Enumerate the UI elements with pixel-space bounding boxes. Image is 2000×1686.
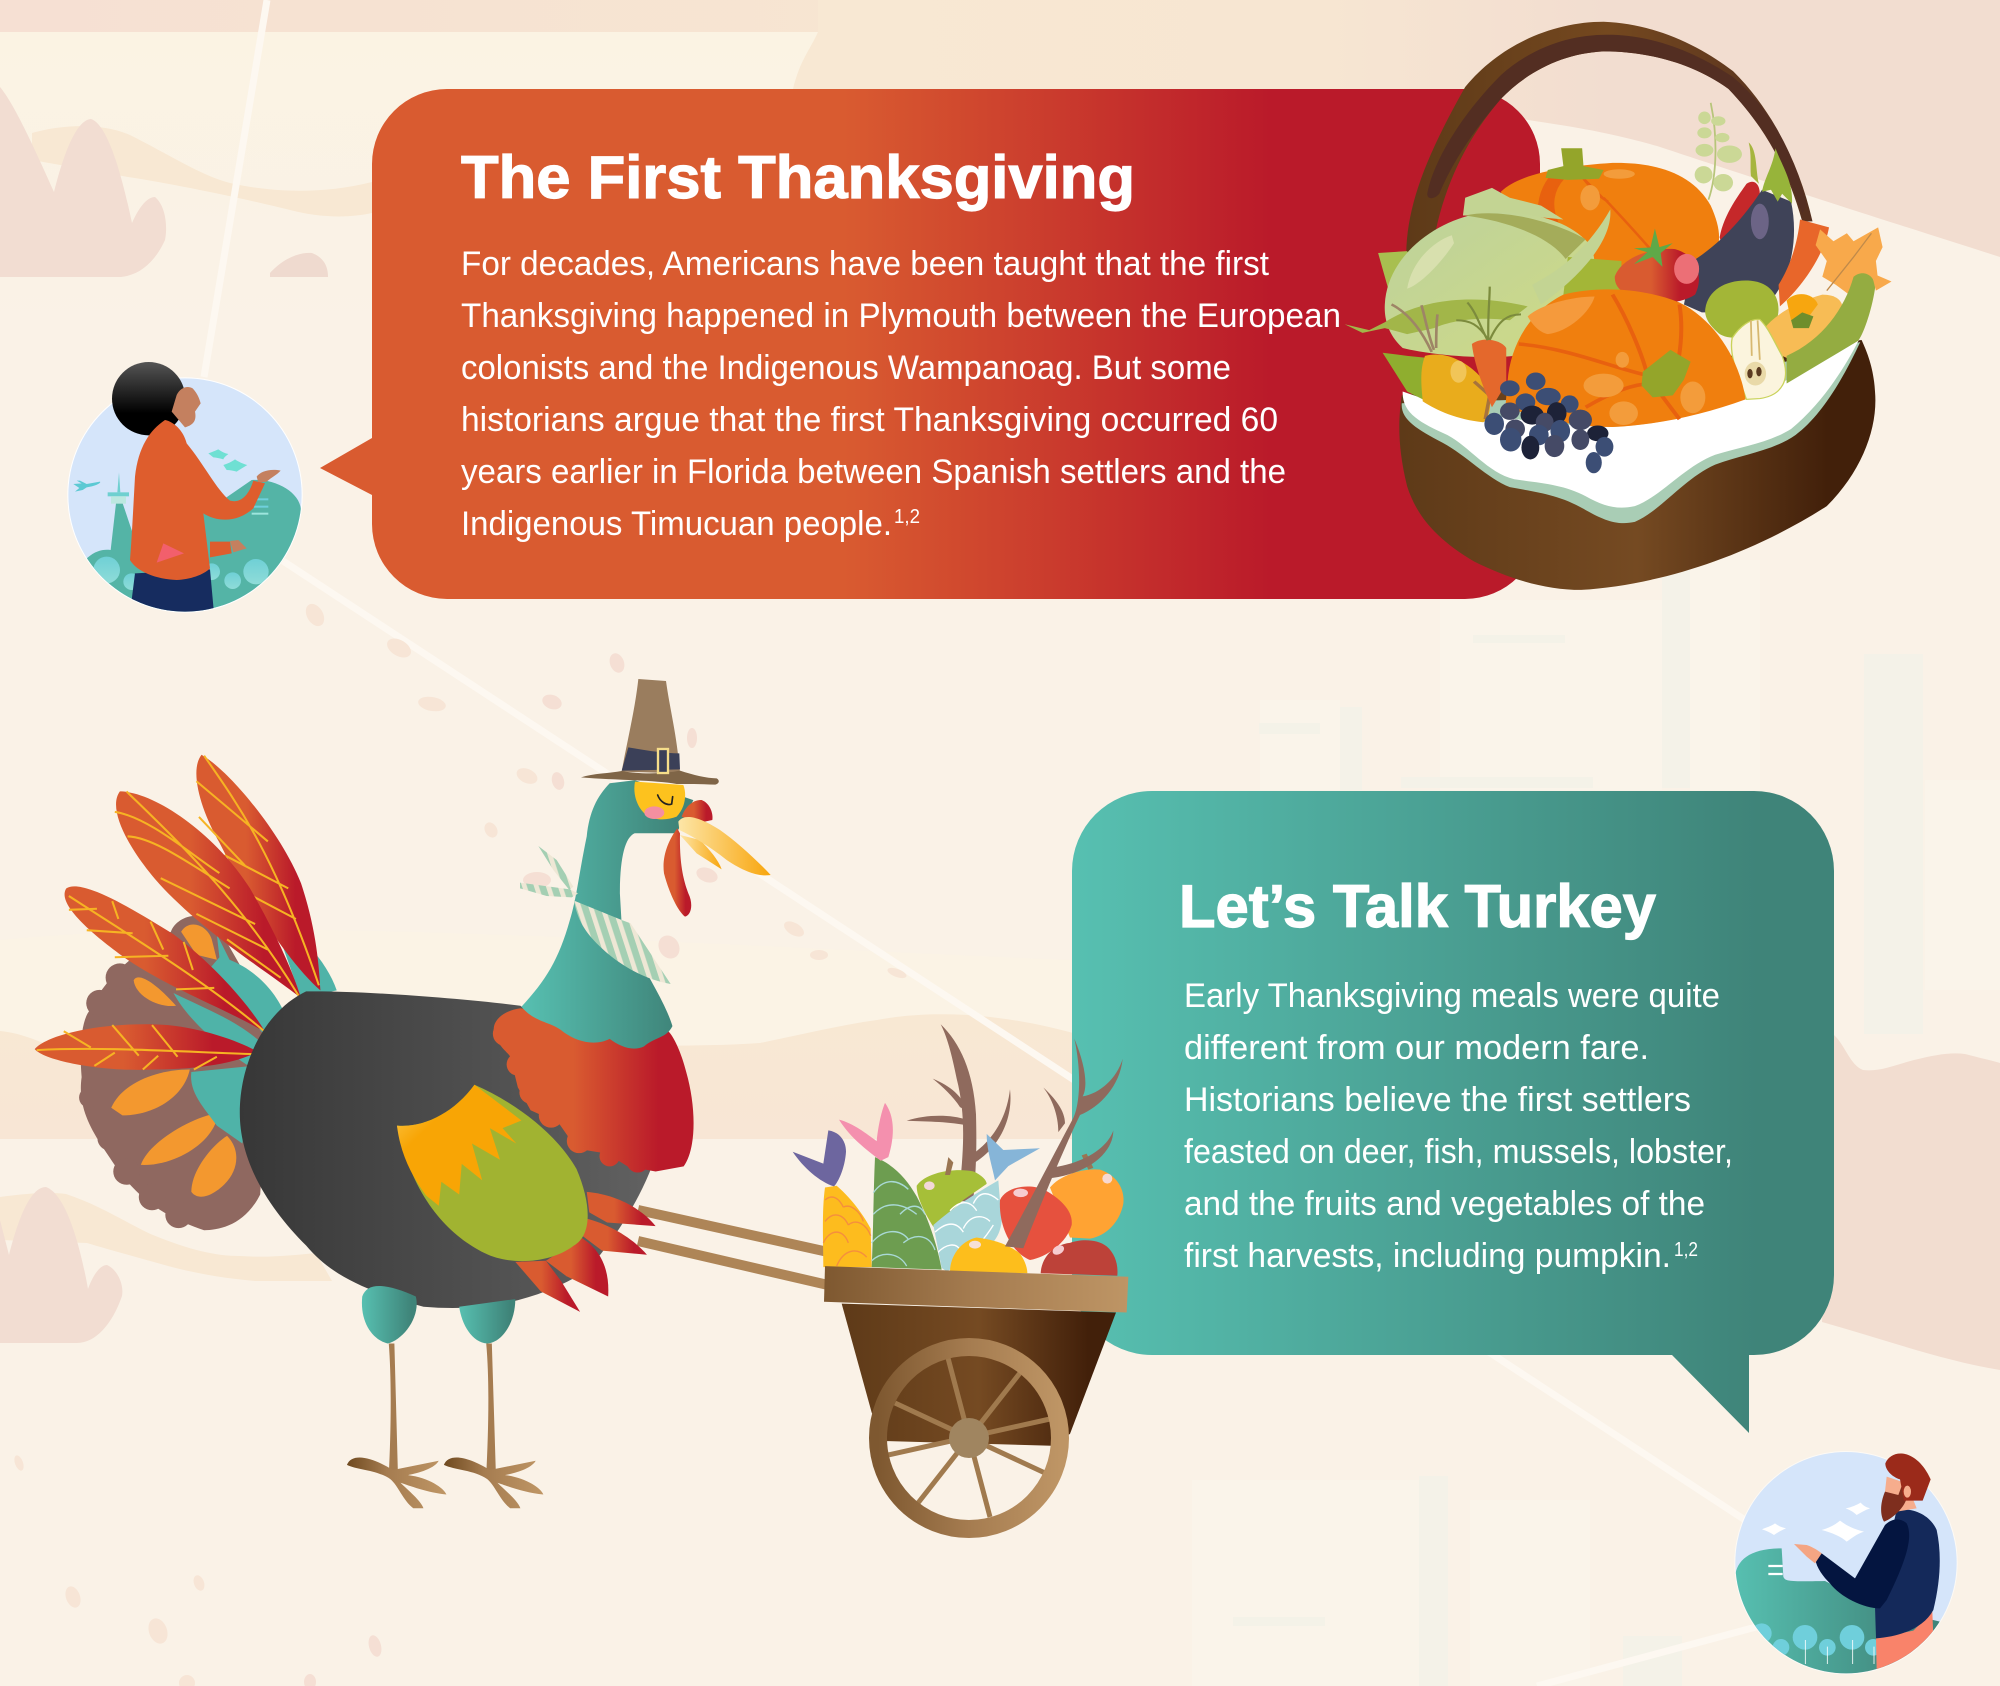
red apple (1000, 1187, 1072, 1260)
antler right (1005, 1039, 1123, 1248)
tomato (1615, 229, 1699, 303)
body text: early meals: feasted on deer, fish, mussels, lobster, (1184, 1133, 1733, 1171)
back pumpkin (1501, 148, 1719, 285)
body text: first Thanksgiving: Thanksgiving happened in Plymouth between the European (461, 297, 1341, 335)
wheel (878, 1347, 1060, 1529)
cart rim (824, 1266, 1128, 1312)
cart load (793, 1024, 1128, 1446)
face (634, 782, 685, 819)
body text: first Thanksgiving: historians argue that the first Thanksgiving occurred 60 (461, 401, 1278, 439)
wing (397, 1085, 588, 1261)
feather B (115, 791, 301, 998)
body text: early meals: Early Thanksgiving meals were quite (1184, 977, 1720, 1015)
feather D (35, 1024, 258, 1070)
panel: Let's Talk Turkey (1072, 791, 1834, 1433)
leaf sprig (1695, 103, 1742, 200)
body text: first Thanksgiving: colonists and the Indigenous Wampanoag. But some (461, 349, 1231, 387)
leg tops (362, 1286, 515, 1343)
illustration: cart poles (638, 1210, 828, 1285)
cabbage (1345, 188, 1621, 357)
body text: first Thanksgiving: years earlier in Florida between Spanish settlers and the (461, 453, 1286, 491)
blue fish (933, 1180, 1002, 1271)
body (240, 991, 663, 1308)
feather A (196, 755, 320, 990)
pear half (1731, 319, 1786, 399)
red breast (493, 1008, 694, 1173)
body text: early meals: 1,2 (1674, 1239, 1698, 1261)
small carrot (1392, 287, 1521, 407)
body text: first Thanksgiving: For decades, Americans have been taught that the first (461, 245, 1270, 283)
green apple (1705, 280, 1778, 338)
panel: The First Thanksgiving (320, 89, 1540, 599)
heading: Let's Talk Turkey: Let’s Talk Turkey (1179, 873, 1657, 940)
person left: man in circle (67, 362, 303, 617)
fish green (872, 1157, 942, 1270)
cheek (644, 806, 664, 819)
cloth (1402, 340, 1860, 523)
body text: early meals: Historians believe the first settlers (1184, 1081, 1691, 1119)
legs (389, 1343, 496, 1475)
green apple (917, 1170, 987, 1227)
eggplant (1684, 148, 1794, 312)
yellow apple (950, 1237, 1027, 1273)
carrot and maple leaf (1779, 219, 1883, 306)
body text: first Thanksgiving: Indigenous Timucuan people. (461, 505, 892, 543)
yellow pear and leaf (1383, 353, 1490, 422)
wattle (664, 800, 713, 917)
dark red apple (1041, 1240, 1118, 1276)
speech bubble: red (320, 89, 1540, 599)
heading: The First Thanksgiving: The First Thanksgiving (461, 144, 1135, 211)
body text: early meals (1184, 977, 1733, 1275)
scarf (520, 846, 671, 984)
speech bubble: teal (1072, 791, 1834, 1433)
neck and shoulder (521, 780, 693, 1049)
feet (347, 1458, 543, 1508)
body text: early meals: first harvests, including pumpkin. (1184, 1237, 1671, 1275)
body text: early meals: and the fruits and vegetables of the (1184, 1185, 1705, 1223)
tail orange marks (111, 925, 236, 1197)
body text: first Thanksgiving: 1,2 (894, 506, 920, 528)
rear tail feathers (515, 1192, 656, 1312)
pilgrim hat (581, 679, 719, 785)
fish yellow (823, 1186, 872, 1267)
beak (678, 817, 771, 875)
cart bed (842, 1304, 1116, 1446)
body text: early meals: different from our modern fare. (1184, 1029, 1649, 1067)
gourds and cucumber (1764, 273, 1892, 384)
illustration: turkey (35, 755, 694, 1508)
body text: first Thanksgiving (461, 245, 1341, 543)
feather C (65, 886, 265, 1032)
basket handle (1406, 22, 1813, 253)
grapes (1484, 372, 1613, 473)
basket body (1399, 340, 1875, 590)
illustration: turkey head with hat (520, 679, 771, 984)
orange (1050, 1169, 1124, 1239)
tail fan (78, 916, 270, 1230)
eye (658, 795, 673, 804)
antler left (907, 1024, 1011, 1202)
illustration: harvest basket (1345, 22, 1892, 590)
chili (1720, 182, 1760, 245)
teal tail base (173, 911, 337, 1143)
person right: bearded man in circle (1733, 1451, 1958, 1686)
illustration: harvest cart (793, 1024, 1128, 1529)
front pumpkin (1505, 289, 1746, 427)
